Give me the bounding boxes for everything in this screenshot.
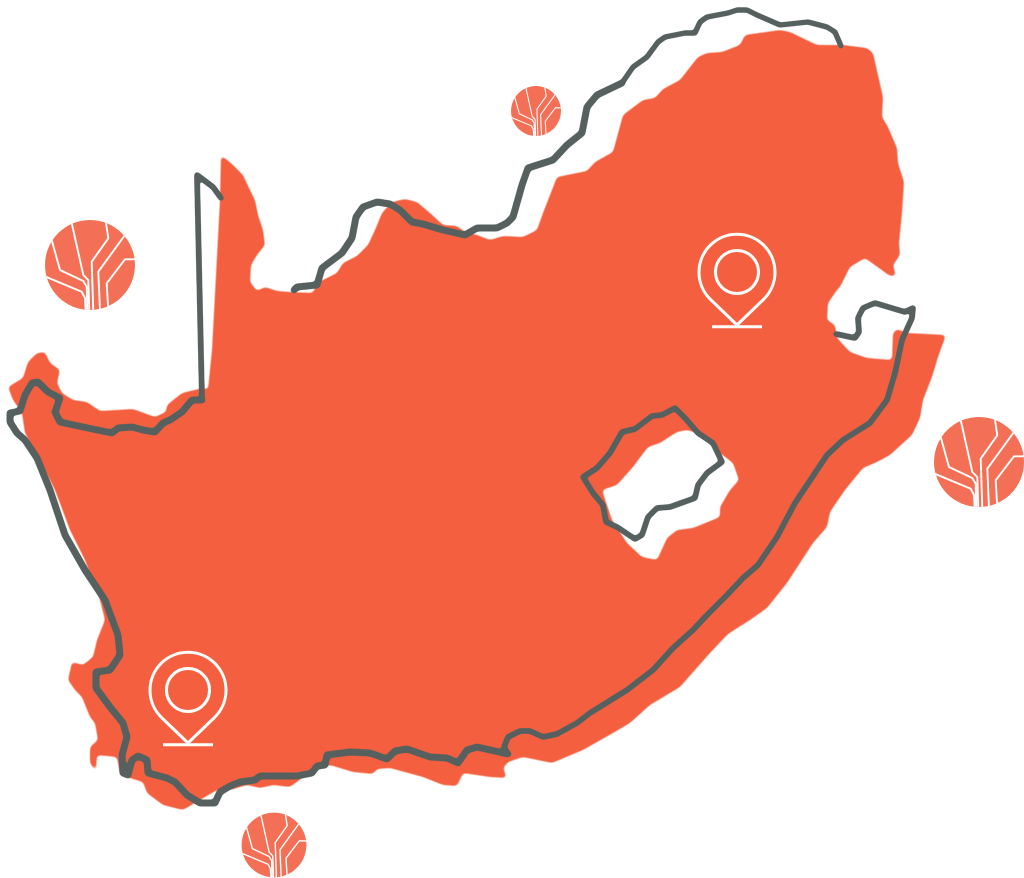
icon: tree badge south bbox=[241, 813, 307, 878]
border outline: frontier lines bbox=[10, 10, 913, 803]
icon: tree badge east bbox=[933, 417, 1024, 508]
icon: tree badge north bbox=[510, 86, 562, 137]
icon: location pin south-west bbox=[150, 652, 226, 745]
icon: location pin north-east bbox=[699, 234, 775, 327]
icon: tree badge west bbox=[44, 220, 136, 311]
